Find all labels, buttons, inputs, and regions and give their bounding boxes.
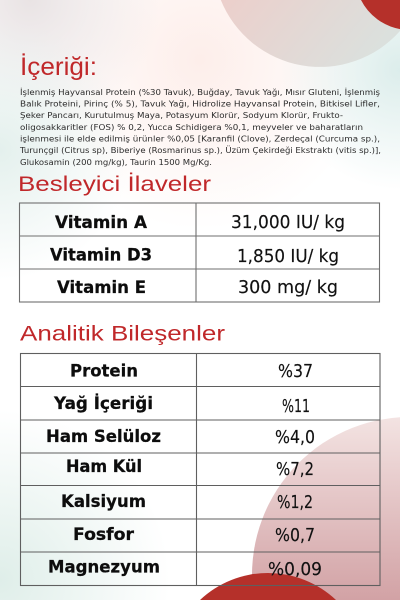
- row: Ham Kül: %7,2: [276, 460, 314, 480]
- ingredients text block: İşlenmiş Hayvansal Protein (%30 Tavuk), Buğday, Tavuk Yağı, Mısır Gluteni, İşlenmiş: [20, 87, 380, 97]
- row: Vitamin A: Vitamin A: [55, 213, 148, 233]
- row: Fosfor: %0,7: [275, 526, 315, 546]
- row: Vitamin E: 300 mg/ kg: [238, 278, 338, 298]
- row: Ham Kül: [66, 457, 314, 480]
- decorative circle: bottom pink: [252, 417, 400, 600]
- row: Magnezyum: %0,09: [268, 560, 322, 580]
- row: Ham Selüloz: [46, 427, 315, 448]
- decorative circle: top pale: [221, 0, 400, 67]
- row: Ham Selüloz: Ham Selüloz: [46, 427, 161, 447]
- row: Protein: %37: [278, 362, 313, 382]
- ingredients text block: Balık Proteini, Pirinç (% 5), Tavuk Yağı, Hidrolize Hayvansal Protein, Bitkisel Lifler,: [20, 98, 380, 108]
- row: Kalsiyum: Kalsiyum: [61, 492, 146, 512]
- heading: İçeriği: İçeriği:: [20, 52, 97, 81]
- row: Protein: Protein: [70, 362, 138, 382]
- row: Vitamin A: [55, 213, 345, 233]
- row: Yağ İçeriği: Yağ İçeriği: [53, 392, 153, 414]
- row: Vitamin D3: 1,850 IU/ kg: [237, 247, 339, 267]
- row: Kalsiyum: [61, 492, 313, 513]
- table: Analitik Bileşenler: [20, 354, 380, 586]
- row: Yağ İçeriği: [53, 392, 310, 417]
- decorative circle: bottom red: [200, 573, 336, 600]
- row: Fosfor: [73, 525, 315, 546]
- row: Vitamin E: [57, 278, 338, 298]
- row: Kalsiyum: %1,2: [277, 493, 313, 513]
- row: Ham Kül: Ham Kül: [66, 457, 142, 477]
- decorative circle: top red: [361, 0, 400, 29]
- heading: Besleyici İlaveler: Besleyici İlaveler: [18, 173, 211, 196]
- row: Vitamin E: Vitamin E: [57, 278, 146, 298]
- ingredients text block: Glukosamin (200 mg/kg), Taurin 1500 Mg/Kg.: [20, 157, 212, 167]
- row: Vitamin D3: Vitamin D3: [50, 246, 152, 266]
- row: Vitamin A: 31,000 IU/ kg: [231, 213, 345, 233]
- row: Fosfor: Fosfor: [73, 525, 135, 545]
- heading: Analitik Bileşenler: Analitik Bileşenler: [20, 322, 225, 346]
- row: Vitamin D3: [50, 246, 339, 267]
- row: Ham Selüloz: %4,0: [275, 428, 315, 448]
- ingredients text block: [19, 87, 381, 167]
- table: Besleyici İlaveler: [20, 203, 380, 302]
- ingredients text block: Şeker Pancarı, Kurutulmuş Maya, Potasyum Klorür, Sodyum Klorür, Frukto-: [20, 110, 343, 120]
- ingredients text block: oligosakkaritler (FOS) % 0,2, Yucca Schidigera %0,1, meyveler ve baharatların: [20, 122, 363, 132]
- ingredients text block: Turunçgil (Citrus sp), Biberiye (Rosmarinus sp.), Üzüm Çekirdeği Ekstraktı (vitis sp.)],: [19, 145, 381, 155]
- row: Magnezyum: Magnezyum: [48, 558, 160, 578]
- ingredients text block: işlenmesi ile elde edilmiş ürünler %0,05 [Karanfil (Clove), Zerdeçal (Curcuma sp.),: [20, 134, 380, 144]
- row: Yağ İçeriği: %11: [282, 397, 310, 417]
- row: Magnezyum: [48, 558, 322, 580]
- row: Protein: [70, 362, 313, 382]
